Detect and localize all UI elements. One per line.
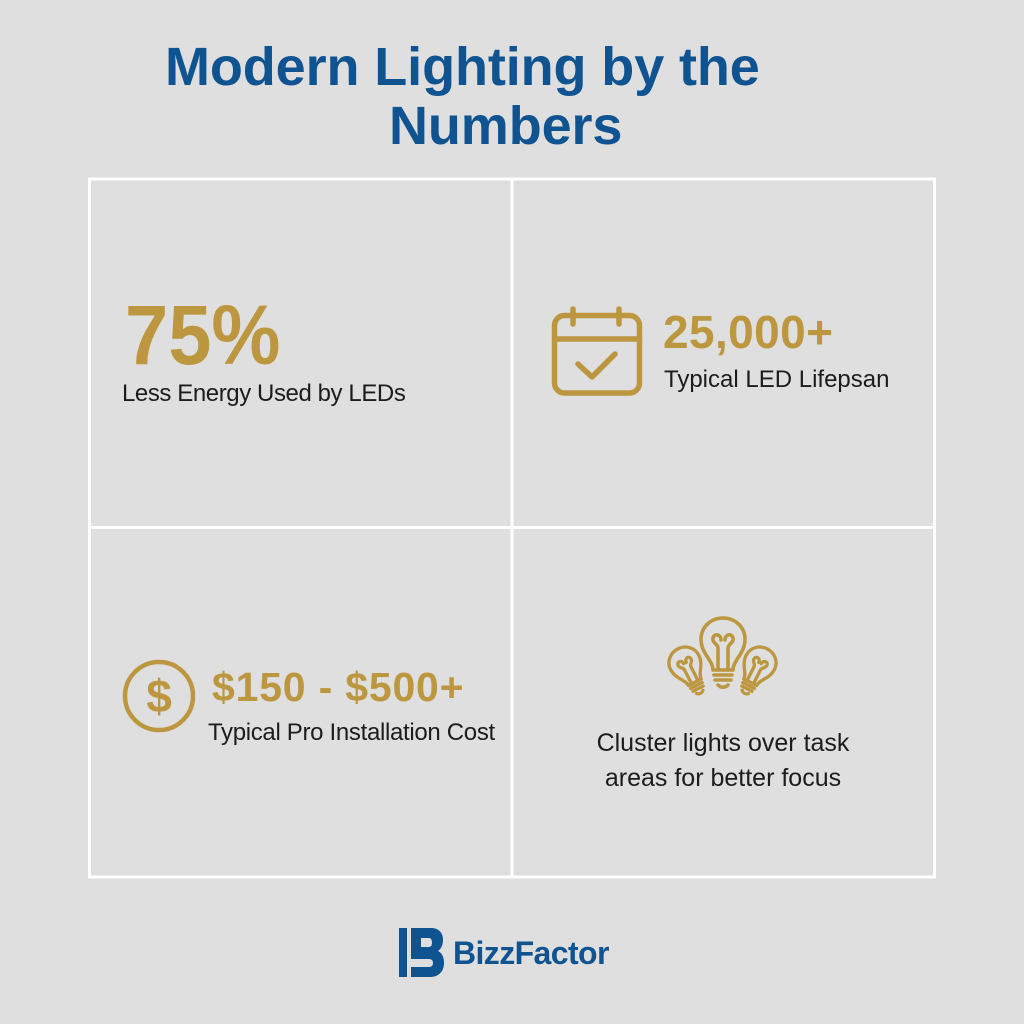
- panel: cluster tip: [597, 616, 850, 792]
- stat: price range: $150 - $500+: [212, 664, 464, 710]
- icon: dollar coin: $: [146, 670, 172, 722]
- panel: installation cost: [122, 660, 495, 746]
- stat: 75%: 75%: [125, 288, 281, 382]
- label: installation cost: Typical Pro Installation Cost: [208, 719, 495, 746]
- icon: calendar with check: [552, 306, 642, 396]
- icon: three light bulbs: [667, 616, 778, 696]
- logo wordmark: BizzFactor: [453, 935, 609, 971]
- panel: energy stat: [122, 288, 405, 407]
- stat: 25,000+: 25,000+: [663, 306, 833, 358]
- logo mark: [399, 928, 444, 977]
- title: Numbers: [389, 96, 622, 156]
- logo: BizzFactor: [399, 928, 609, 977]
- icon: dollar coin: [122, 660, 196, 732]
- panel: lifespan stat: [552, 306, 889, 396]
- text: cluster tip: [597, 729, 850, 792]
- label: lifespan: Typical LED Lifepsan: [664, 366, 889, 393]
- label: less energy: Less Energy Used by LEDs: [122, 380, 405, 407]
- title: Modern Lighting by the: [165, 37, 760, 97]
- title: [165, 37, 760, 156]
- text: cluster tip: areas for better focus: [605, 764, 841, 792]
- text: cluster tip: Cluster lights over task: [597, 729, 849, 757]
